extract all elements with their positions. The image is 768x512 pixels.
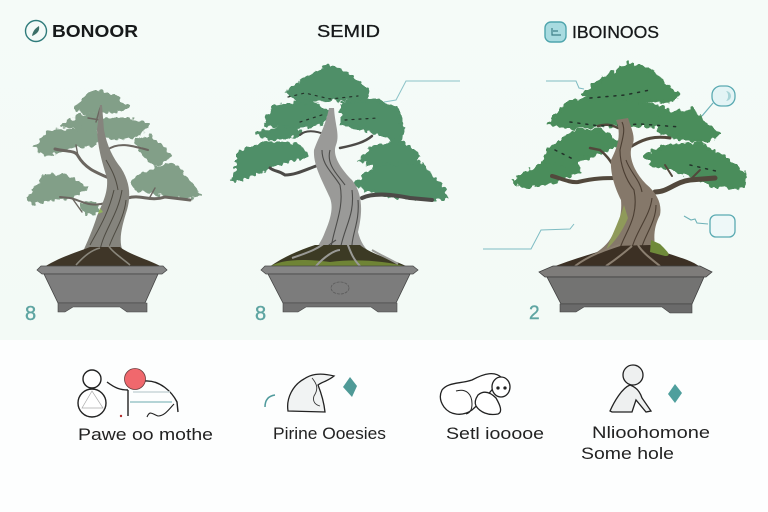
trunk: [574, 118, 660, 266]
pot: [539, 266, 712, 313]
heading: BONOOR: [52, 21, 138, 41]
callout: top left line: [546, 81, 584, 89]
foliage: [233, 66, 447, 198]
icon: crouching animal: [440, 374, 510, 415]
pot: [261, 266, 418, 312]
heading icon: [26, 20, 46, 42]
panel: step three: [440, 374, 544, 443]
number: 2: [529, 303, 540, 324]
icon: figures and red ball: [78, 368, 178, 417]
pot: [37, 266, 167, 312]
panel: step two: [265, 374, 386, 443]
soil: [553, 240, 700, 267]
label: Nlioohomone: [592, 423, 710, 442]
panel: first bonsai: [25, 20, 199, 325]
number: 8: [25, 303, 36, 325]
soil: [44, 245, 162, 267]
panel: step one: [78, 368, 213, 444]
heading icon: [545, 22, 566, 42]
number: 8: [255, 303, 266, 325]
label: Pirine Ooesies: [273, 424, 386, 443]
soil with moss: [269, 240, 408, 267]
label: Pawe oo mothe: [78, 425, 213, 444]
branches: [552, 90, 720, 192]
branches: [55, 108, 190, 212]
callout line: [384, 81, 460, 102]
label: Setl iooooe: [446, 424, 544, 443]
panel: second bonsai: [233, 21, 460, 325]
branches: [270, 93, 432, 200]
icon: crawling figure: [610, 365, 682, 412]
trunk: [76, 105, 138, 266]
foliage: [28, 91, 199, 213]
panel: step four: [581, 365, 710, 463]
callout: lower line: [483, 224, 574, 249]
heading: IBOINOOS: [572, 22, 659, 42]
heading: SEMID: [317, 21, 380, 41]
panel: third bonsai: [483, 22, 745, 324]
foliage: [514, 64, 745, 187]
label second line: Some hole: [581, 444, 674, 463]
callout: round badge: [702, 86, 735, 116]
icon: leaning figure: [265, 374, 357, 412]
callout: square badge: [684, 215, 735, 237]
trunk: [293, 108, 392, 266]
